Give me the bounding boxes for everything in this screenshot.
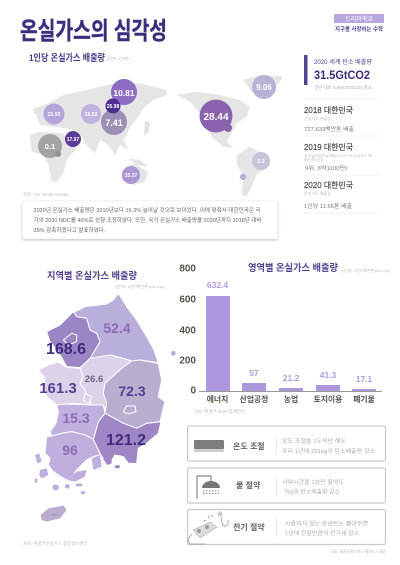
bubble: 2.2 <box>252 152 270 170</box>
source: action cards: 자료: 세종특별자치시 행복도시세종 <box>330 549 387 554</box>
region values: 15.3 <box>62 410 90 426</box>
heading: per capita emissions: 1인당 온실가스 배출량 <box>29 52 105 64</box>
bar: industrial processes 57: 57 <box>249 368 259 378</box>
panel: Korea 2019: 9위, 6억1100만t <box>305 164 348 172</box>
region values: 96 <box>62 442 78 458</box>
bubble: 10.81: 10.81 <box>113 88 135 98</box>
card: water saving: 물 절약 <box>236 480 261 490</box>
heading: regional emissions <box>47 270 165 289</box>
region values <box>39 320 146 517</box>
region values: 161.3 <box>39 380 77 397</box>
bubble: 17.97: 17.97 <box>67 137 79 143</box>
bar: waste 17.1 <box>352 374 376 391</box>
x axis labels: 산업공정 <box>240 394 268 404</box>
panel: Korea 2019 <box>304 142 380 175</box>
bar: agriculture 21.2 <box>279 373 303 391</box>
region values: 4.8 <box>51 512 58 517</box>
region: Gyeongbuk <box>103 360 165 428</box>
card: electricity saving <box>188 510 386 544</box>
icon: shower <box>197 476 220 499</box>
heading: sector emissions: 영역별 온실가스 배출량 <box>248 262 338 274</box>
y axis labels: 0 <box>190 386 196 396</box>
bar: land use 41.3 <box>316 370 340 391</box>
card: temperature control: 온도 조절 <box>233 441 265 451</box>
panel: Korea 2020: 온실가스 배출량 <box>304 190 331 196</box>
region values: 121.2 <box>106 432 146 449</box>
heading: sector emissions: (단위: 1년/백만톤co2.eq) <box>342 268 391 273</box>
bar: industrial processes 57 <box>242 368 266 391</box>
bubbles: per capita emissions by region <box>38 75 276 184</box>
heading: sector emissions <box>248 262 391 274</box>
panel: Korea 2019: 출량 세계 순위 <box>304 157 323 162</box>
panel: Korea 2020: 1인당 11.66톤 배출 <box>304 202 352 210</box>
region values: 72.3 <box>118 383 146 399</box>
title: 온실가스의 심각성 <box>20 18 167 45</box>
region values: 26.6 <box>85 374 103 385</box>
heading: regional emissions: 지역별 온실가스 배출량 <box>47 270 137 282</box>
bubble: 9.06: 9.06 <box>256 83 272 92</box>
bar chart: sector emissions <box>179 264 382 404</box>
y axis labels: 200 <box>179 356 196 366</box>
bar: energy 632.4: 632.4 <box>207 280 228 290</box>
y axis labels: 400 <box>179 326 196 336</box>
bubble: 17.97 <box>65 131 81 147</box>
region: Gangwon <box>73 293 158 363</box>
panel: Korea 2018: 727.633백만톤 배출 <box>304 125 354 133</box>
bubble: 0.1 <box>38 134 62 158</box>
bubble: 28.44 <box>200 100 232 132</box>
x axis labels <box>207 394 375 404</box>
card: temperature control <box>188 426 386 461</box>
panel: 2020 world carbon emissions <box>304 55 372 91</box>
source: world map: 자료: Our World in Data <box>23 191 69 198</box>
bubble: 0.1: 0.1 <box>45 142 55 151</box>
region: Gyeonggi <box>47 312 100 368</box>
bubble: 7.41: 7.41 <box>105 118 123 128</box>
source: regional map: 자료: 환경부온실가스 종합정보센터 <box>23 540 87 547</box>
bubble: small South America <box>240 174 246 180</box>
icon: air conditioner <box>194 440 224 452</box>
islands: south coast <box>35 453 120 494</box>
bar: land use 41.3: 41.3 <box>320 370 337 380</box>
heading: regional emissions: (단위: 1년/백만톤co2.eq) <box>115 284 165 289</box>
bar: energy 632.4 <box>206 280 230 391</box>
y axis labels <box>179 264 196 396</box>
bubble: 9.06 <box>252 75 276 99</box>
bubble: 7.41 <box>101 109 127 135</box>
bubble: 26.98 <box>106 98 120 114</box>
region: Jeonnam <box>45 432 100 480</box>
y axis labels: 600 <box>179 294 196 306</box>
panel: Korea 2018: 온실가스 배출량 <box>304 115 331 121</box>
badge: school name <box>334 14 384 33</box>
text box: summary <box>22 201 278 239</box>
panel: Korea 2019: 2019 대한민국 <box>304 142 353 152</box>
panel: Korea 2019: 글로벌카본프로젝트(GCP) 이 온실가스 배 <box>304 153 372 158</box>
card: water saving: 샤워시간을 1분만 줄여도 <box>282 478 344 486</box>
heading: per capita emissions: (단위: 1년/톤) <box>107 55 131 61</box>
x axis labels: 농업 <box>284 394 298 404</box>
bubble: 15.93 <box>44 104 64 124</box>
x axis labels: 토지이용 <box>314 394 342 404</box>
card: electricity saving: 1년에 한달만큼의 전기세 감소 <box>285 529 359 537</box>
card: water saving <box>188 468 386 503</box>
region: Chungnam <box>38 362 92 405</box>
bubble: 15.52 <box>81 104 101 124</box>
bar: agriculture 21.2: 21.2 <box>283 373 300 383</box>
text box: summary: 35% 감축하겠다고 발표하였다. <box>34 226 106 234</box>
bar: waste 17.1: 17.1 <box>356 374 373 384</box>
island: Ulleung <box>171 351 176 356</box>
source: bar chart: 자료: 환경부 2020 통계연감 <box>194 408 245 415</box>
bubble: 2.2: 2.2 <box>257 159 265 165</box>
region values: 52.4 <box>103 320 131 336</box>
card: temperature control: 우리 1년에 231kg의 탄소배출량 감소 <box>282 447 375 455</box>
text box: summary: 가의 2030 NDC를 40%로 상향 조정하였다. 또한, 국가 온실가스 배출량을 2030년까지 2018년 대비 <box>34 216 262 224</box>
region: Gyeongnam <box>93 413 161 463</box>
outline: Daegu <box>123 406 136 414</box>
panel: Korea 2018 <box>304 99 380 136</box>
bubble: 15.93: 15.93 <box>48 112 61 118</box>
island: Jeju <box>41 506 67 522</box>
x axis labels: 에너지 <box>207 394 228 404</box>
bubble: 10.81 <box>111 79 137 105</box>
bubble: 15.52: 15.52 <box>85 112 98 118</box>
x axis labels: 폐기물 <box>353 394 375 404</box>
card: water saving: 7kg의 탄소배출량 감소 <box>284 488 340 496</box>
panel: Korea 2018: 2018 대한민국 <box>304 105 353 115</box>
bubble: 28.44: 28.44 <box>203 112 229 123</box>
panel: Korea 2020 <box>304 180 380 213</box>
world map <box>30 75 283 197</box>
bubble: 26.98: 26.98 <box>107 104 119 110</box>
panel: Korea 2020: 2020 대한민국 <box>304 180 353 190</box>
badge: school name: 드리미학교 <box>345 15 373 23</box>
region values: 168.6 <box>46 341 86 358</box>
text box: summary: 2030년 온실가스 배출량은 2010년보다 16.3% 늘어날 것으로 보이었다. 이에 맞춰서 대한민국은 국 <box>34 206 261 214</box>
outline: Daejeon <box>83 393 92 405</box>
bubble: 15.37: 15.37 <box>125 173 137 179</box>
panel: 2020 world carbon emissions: 2020 세계 탄소 배출량 <box>314 58 372 66</box>
region: Chungbuk <box>80 355 132 409</box>
map: South Korea regions <box>35 293 176 522</box>
badge: school name: 지구를 사랑하는 수학 <box>335 25 383 33</box>
region: Jeonbuk <box>50 404 105 439</box>
y axis labels: 800 <box>179 264 196 274</box>
panel: 2020 world carbon emissions: 전년 대비 5.8%(2GtCO2) 감소 <box>314 84 372 91</box>
outline: Seoul <box>63 333 77 345</box>
card: electricity saving: 전기 절약 <box>233 522 265 532</box>
card: temperature control: 온도 조절을 1도씩만 해도 <box>282 437 346 445</box>
icon: power strip <box>188 512 228 544</box>
bubble: 15.37 <box>122 166 140 184</box>
panel: 2020 world carbon emissions: 31.5GtCO2 <box>314 68 370 82</box>
card: electricity saving: 사용하지 않는 콘센트는 뽑아두면 <box>285 520 368 528</box>
